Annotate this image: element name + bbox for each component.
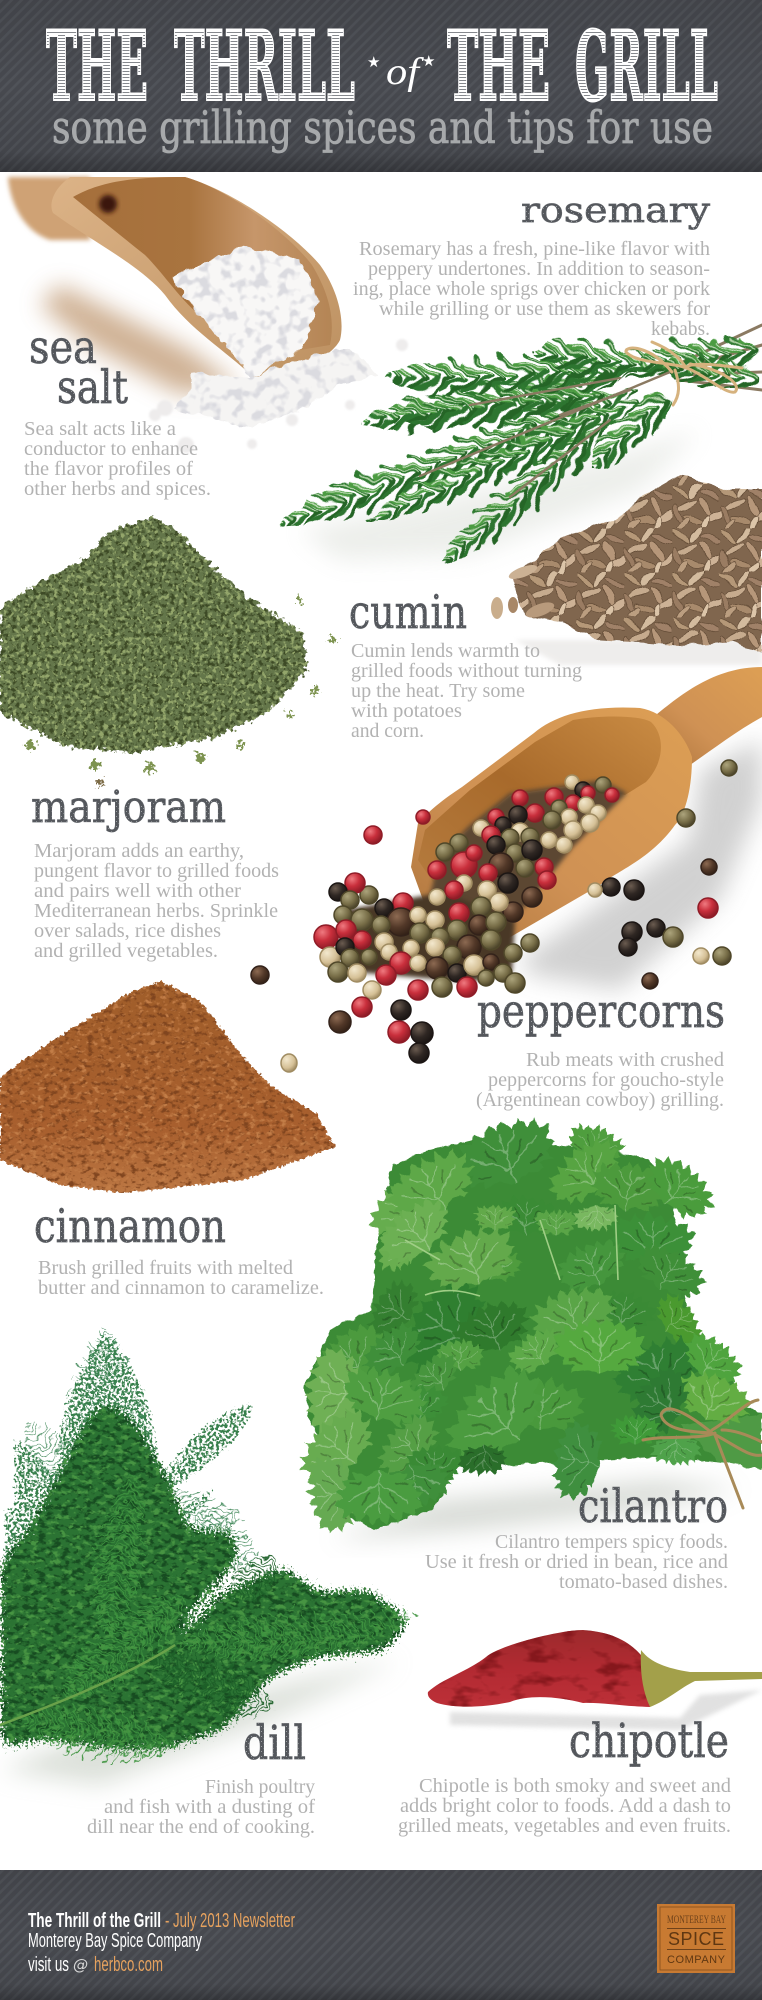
marjoram text: over salads, rice dishes: [34, 920, 221, 942]
logo: Monterey Bay Spice Company: SPICE: [668, 1929, 724, 1949]
footer text: @: [73, 1956, 88, 1974]
sea salt text: [24, 418, 211, 500]
image: cinnamon pile: [0, 981, 335, 1193]
title: ★: [422, 52, 435, 70]
image: sea salt scoop: [8, 177, 408, 453]
chipotle text: grilled meats, vegetables and even fruits.: [398, 1815, 731, 1837]
cilantro text: Use it fresh or dried in bean, rice and: [425, 1551, 728, 1573]
sea salt heading: [29, 320, 128, 414]
logo: Monterey Bay Spice Company: [657, 1904, 735, 1973]
image: cilantro bunch: [287, 1105, 762, 1540]
cumin text: grilled foods without turning: [351, 660, 582, 682]
marjoram text: [34, 840, 279, 962]
cinnamon text: Brush grilled fruits with melted: [38, 1257, 293, 1279]
cumin text: Cumin lends warmth to: [351, 640, 540, 662]
dill text: Finish poultry: [205, 1776, 315, 1798]
title: [46, 10, 718, 123]
peppercorns text: Rub meats with crushed: [526, 1049, 724, 1071]
cumin text: and corn.: [351, 720, 424, 742]
cilantro heading: cilantro: [578, 1479, 728, 1533]
cumin text: up the heat. Try some: [351, 680, 525, 702]
image: red chili: [428, 1630, 762, 1730]
image: rosemary bunch: [266, 325, 762, 583]
footer text: herbco.com: [94, 1954, 163, 1976]
rosemary text: kebabs.: [651, 318, 710, 340]
chipotle text: adds bright color to foods. Add a dash to: [400, 1795, 731, 1817]
cinnamon text: butter and cinnamon to caramelize.: [38, 1277, 324, 1299]
footer text: [28, 1910, 295, 1976]
marjoram text: and grilled vegetables.: [34, 940, 218, 962]
peppercorns text: peppercorns for goucho-style: [488, 1069, 724, 1091]
dill text: dill near the end of cooking.: [87, 1816, 315, 1838]
dill text: [87, 1776, 315, 1838]
logo: Monterey Bay Spice Company: MONTEREY BAY: [667, 1912, 726, 1926]
image: peppercorn scoop: [411, 667, 762, 990]
sea salt heading: sea: [29, 320, 97, 374]
footer text: The Thrill of the Grill: [28, 1910, 161, 1932]
peppercorns heading: peppercorns: [477, 984, 725, 1038]
chipotle text: Chipotle is both smoky and sweet and: [419, 1775, 731, 1797]
footer text: - July 2013 Newsletter: [165, 1910, 295, 1932]
rosemary text: [353, 238, 710, 340]
dill heading: dill: [243, 1716, 306, 1771]
sea salt text: the flavor profiles of: [24, 458, 193, 480]
sea salt heading: salt: [57, 360, 128, 414]
title: of: [386, 51, 424, 93]
cilantro text: Cilantro tempers spicy foods.: [495, 1531, 728, 1553]
footer text: visit us: [28, 1954, 69, 1976]
cinnamon text: [38, 1257, 324, 1299]
peppercorns text: [476, 1049, 724, 1111]
marjoram text: pungent flavor to grilled foods: [34, 860, 279, 882]
footer banner: [0, 1870, 762, 2000]
cilantro text: [425, 1531, 728, 1593]
cumin heading: cumin: [349, 585, 467, 639]
image: cumin pile: [491, 475, 762, 665]
cilantro text: tomato-based dishes.: [559, 1571, 728, 1593]
sea salt text: other herbs and spices.: [24, 478, 211, 500]
dill text: and fish with a dusting of: [104, 1796, 315, 1818]
cumin text: [351, 640, 582, 742]
marjoram text: Mediterranean herbs. Sprinkle: [34, 900, 278, 922]
cinnamon heading: cinnamon: [34, 1199, 226, 1253]
rosemary text: while grilling or use them as skewers for: [379, 298, 710, 320]
rosemary text: Rosemary has a fresh, pine-like flavor with: [359, 238, 710, 260]
image: dill: [0, 1327, 424, 1785]
footer text: Monterey Bay Spice Company: [28, 1930, 202, 1952]
chipotle text: [398, 1775, 731, 1837]
rosemary heading: rosemary: [521, 191, 710, 231]
rosemary text: ing, place whole sprigs over chicken or pork: [353, 278, 710, 300]
marjoram heading: marjoram: [31, 782, 226, 833]
sea salt text: conductor to enhance: [24, 438, 198, 460]
rosemary text: peppery undertones. In addition to season-: [368, 258, 710, 280]
chipotle heading: chipotle: [569, 1714, 729, 1769]
header banner: [0, 0, 762, 172]
cumin text: with potatoes: [351, 700, 462, 722]
image: marjoram pile: [0, 517, 337, 787]
title: ★: [367, 53, 380, 71]
marjoram text: and pairs well with other: [34, 880, 241, 902]
logo: Monterey Bay Spice Company: COMPANY: [667, 1954, 726, 1966]
title: THE: [46, 10, 148, 123]
sea salt text: Sea salt acts like a: [24, 418, 176, 440]
peppercorns text: (Argentinean cowboy) grilling.: [476, 1089, 724, 1111]
title: THE: [447, 10, 550, 123]
title: THRILL: [174, 10, 355, 123]
image: peppercorn heap and loose peppercorns: [251, 760, 737, 1072]
marjoram text: Marjoram adds an earthy,: [34, 840, 244, 862]
